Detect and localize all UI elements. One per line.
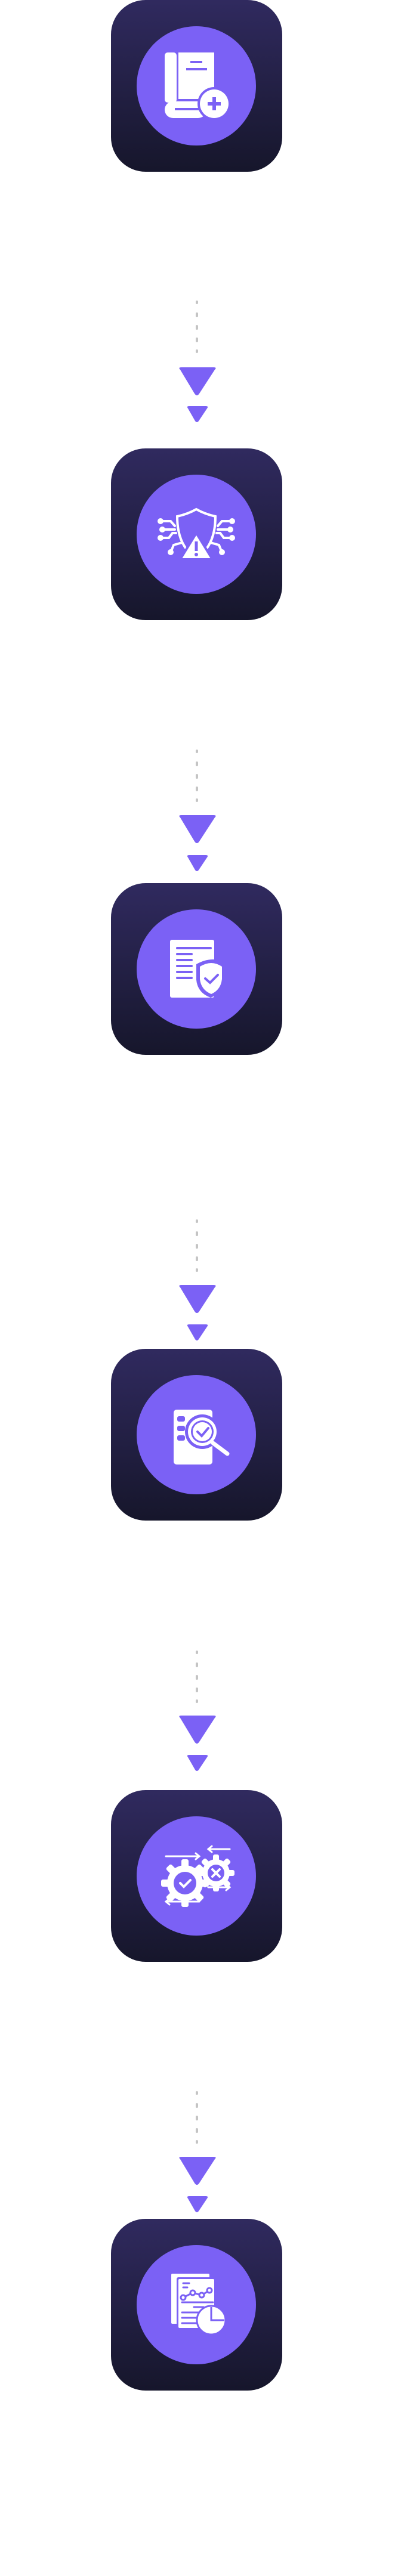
arrow 1 [179,301,216,422]
arrow 5 [179,2091,216,2212]
arrow 4 [179,1651,216,1771]
icon: document with shield check [137,909,256,1029]
icon: list with magnifier check [137,1375,256,1494]
step 2: shield warning tile [111,448,282,620]
step 5: gears tile [111,1790,282,1962]
icon: report with line chart and pie [137,2245,256,2364]
icon: book with plus [137,26,256,145]
arrow 2 [179,750,216,871]
step 1: book icon tile [111,0,282,172]
step 3: document shield tile [111,883,282,1055]
icon: shield with warning and circuits [137,475,256,594]
icon: gears with arrows [137,1816,256,1936]
arrow 3 [179,1219,216,1340]
step 6: report chart tile [111,2219,282,2391]
step 4: search checklist tile [111,1349,282,1521]
